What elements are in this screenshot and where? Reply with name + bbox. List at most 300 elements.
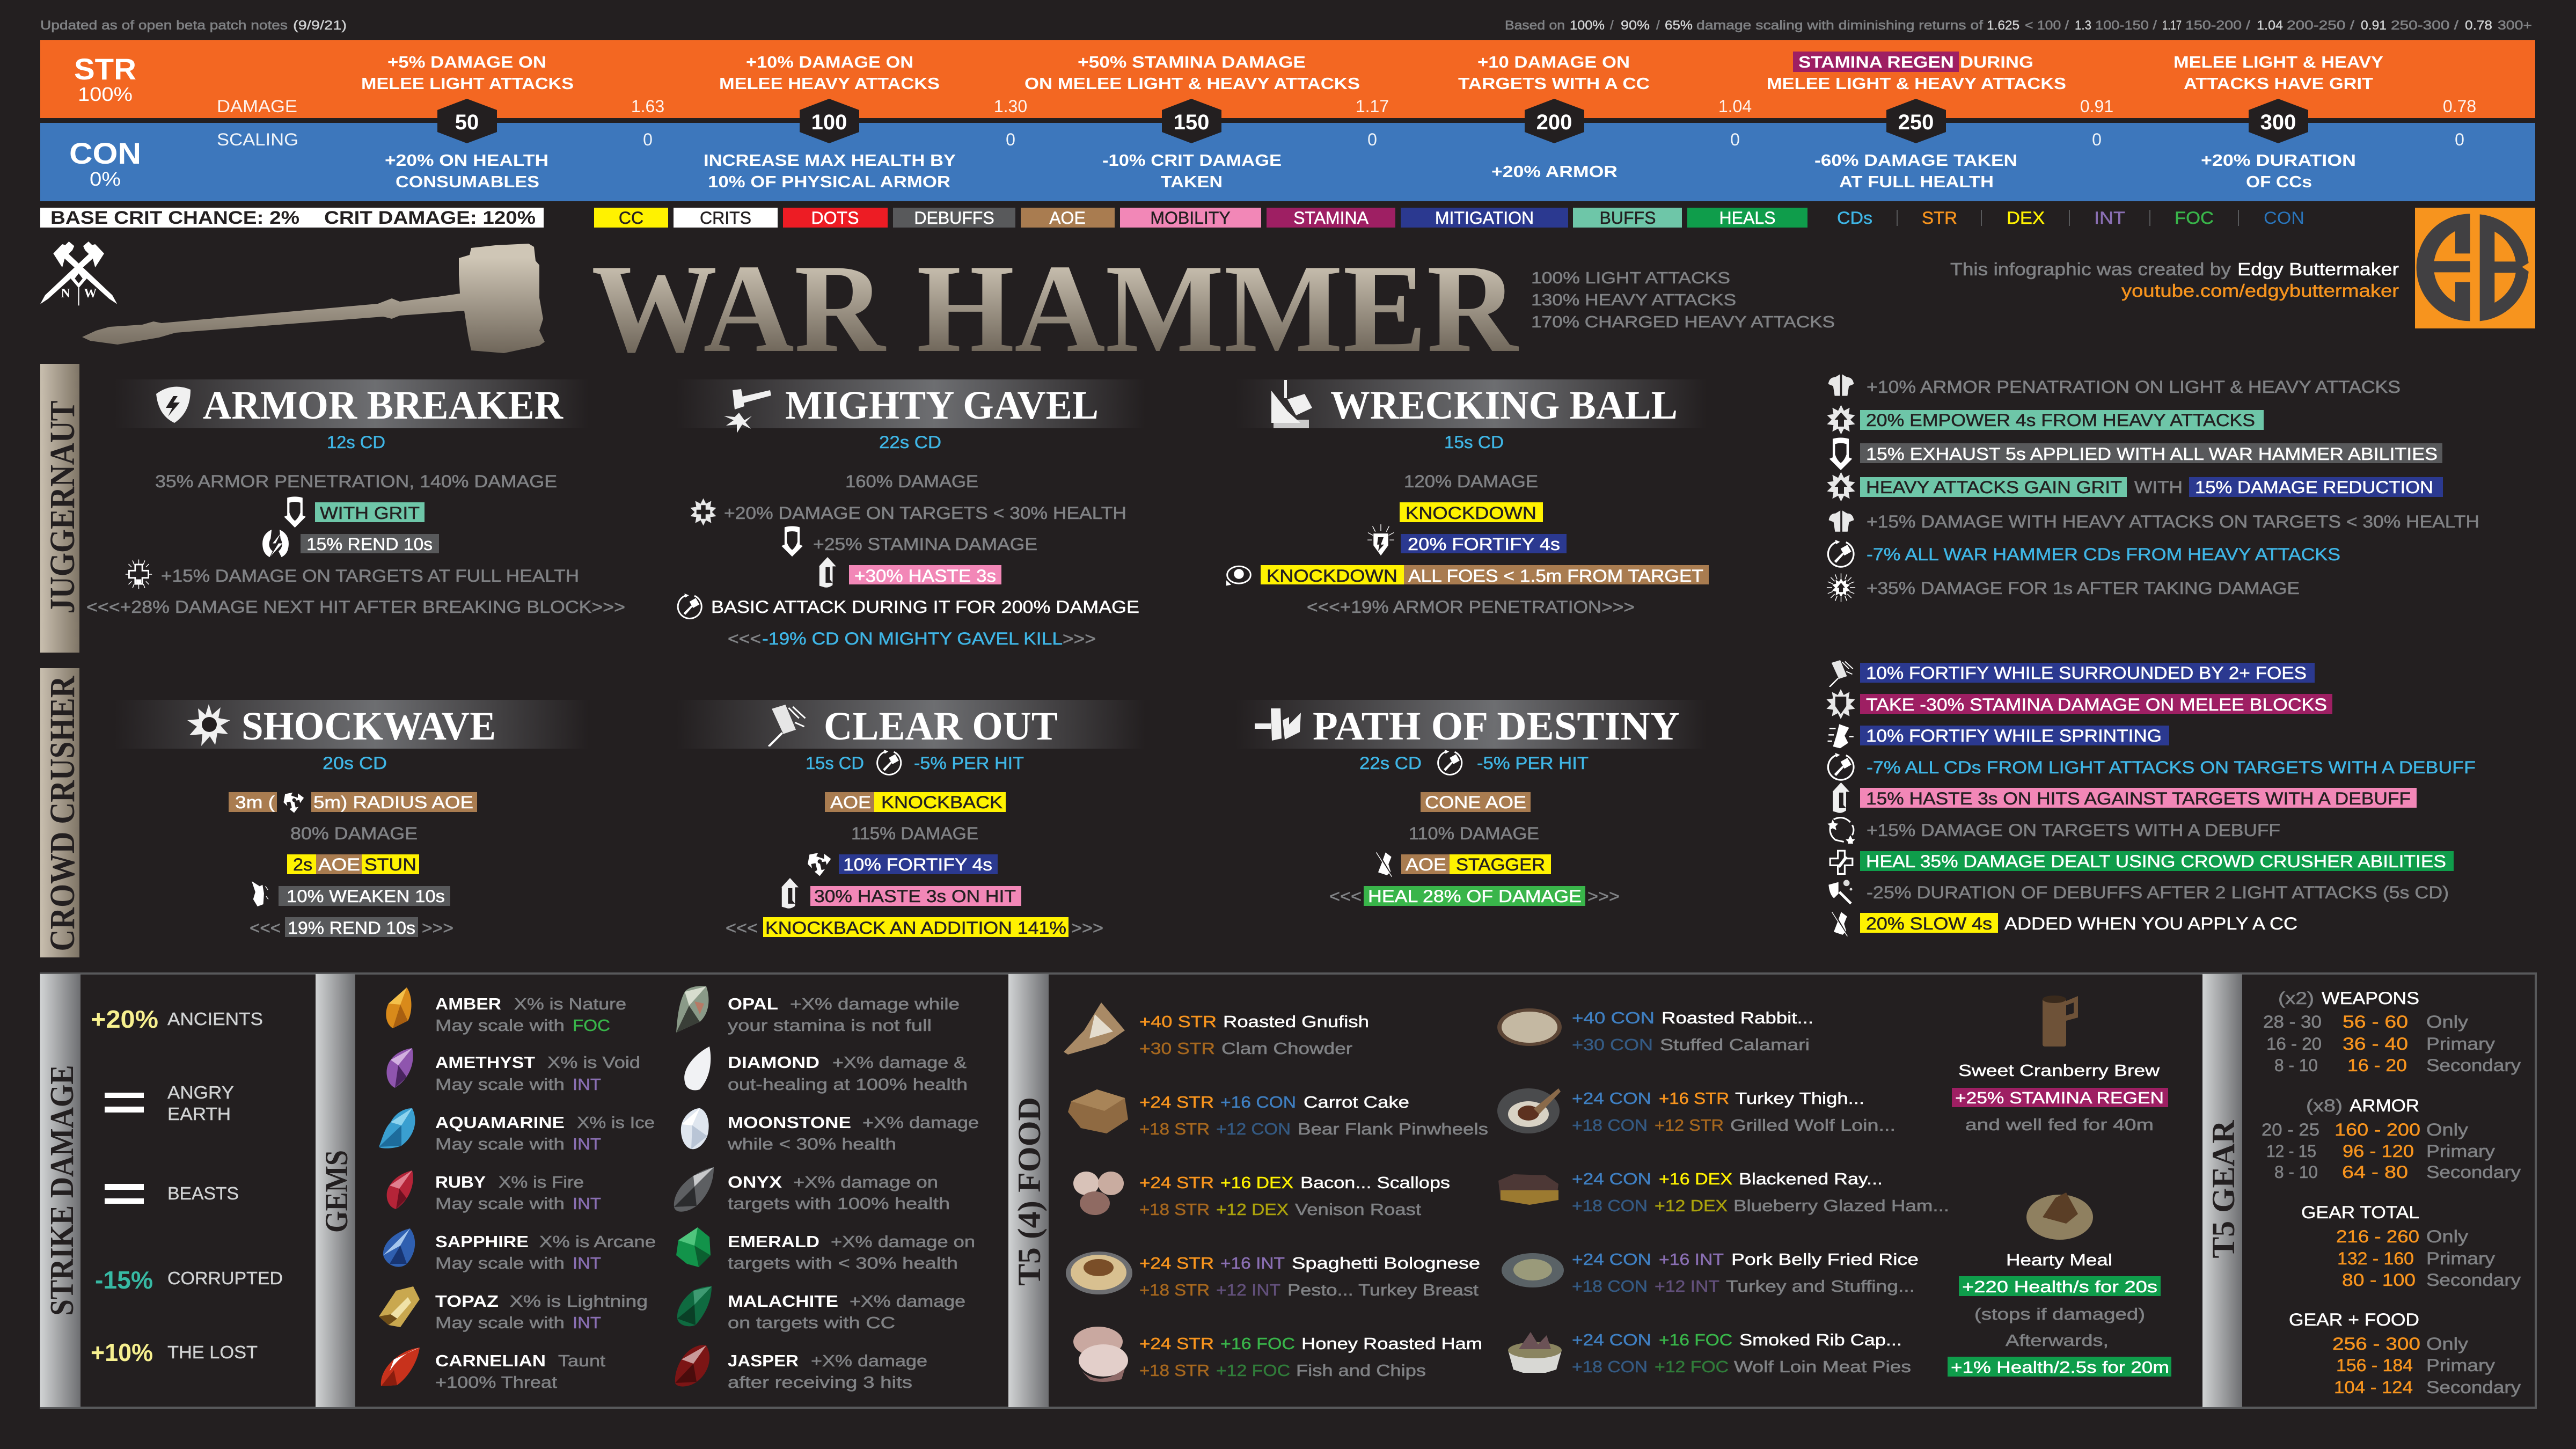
gem: topaz: INT <box>573 1313 601 1332</box>
icon: clear out hammer <box>769 705 806 747</box>
gear: armor: ARMOR <box>2350 1096 2419 1115</box>
fortify: 20% FORTIFY 4s <box>1408 535 1560 554</box>
CON perks: INCREASE MAX HEALTH BY <box>704 151 956 170</box>
passive: cooldown debuff: -7% ALL CDs FROM LIGHT ATTACKS ON TARGETS WITH A DEBUFF <box>1867 758 2476 777</box>
scaling values: 0 <box>1730 130 1740 149</box>
consumable: hearty meal: +1% Health/2.5s for 20m <box>1951 1358 2169 1377</box>
consumable: sweet cranberry brew: and well fed for 40m <box>1965 1115 2154 1134</box>
legend: stat colours: CON <box>2264 208 2304 228</box>
legend: colour chips: MITIGATION <box>1435 208 1534 228</box>
scaling note header: / <box>1656 18 1660 33</box>
scaling values: 1.30 <box>994 97 1027 116</box>
scaling note header: 200-250 / <box>2287 18 2354 33</box>
corrupted row: -15% <box>95 1266 153 1294</box>
knockdown: KNOCKDOWN <box>1406 503 1536 523</box>
legend: colour chips: CRITS <box>700 208 751 228</box>
passive: low health damage: +15% DAMAGE WITH HEAVY ATTACKS ON TARGETS < 30% HEALTH <box>1867 512 2479 531</box>
cooldown: 20s CD <box>323 753 387 773</box>
title: WAR HAMMER <box>591 239 1519 379</box>
food: carrot cake <box>1068 1089 1488 1138</box>
legend: colour chips: DOTS <box>811 208 859 228</box>
section bar: Gems <box>316 974 355 1407</box>
stun: 2s <box>293 855 312 874</box>
gear: armor: 160 - 200 <box>2334 1120 2420 1139</box>
passive: slow <box>1832 912 2297 936</box>
food: blackened ray: Blackened Ray... <box>1739 1169 1883 1188</box>
food: honey roasted ham: Honey Roasted Ham <box>1301 1334 1482 1353</box>
food: spaghetti: Pesto... Turkey Breast <box>1287 1280 1479 1299</box>
upgrade: <<<+19% ARMOR PENETRATION>>> <box>1307 597 1635 617</box>
gem: amethyst: May scale with <box>435 1075 565 1094</box>
gear: weapons: 28 - 30 <box>2263 1012 2322 1031</box>
gear: weapons: Only <box>2426 1012 2468 1031</box>
food: bacon scallops: Venison Roast <box>1295 1200 1421 1219</box>
upgrade <box>1329 886 1620 906</box>
hexagon 150 <box>1162 99 1221 143</box>
gear: armor <box>2262 1096 2521 1182</box>
angry earth row: ANGRY <box>167 1082 234 1102</box>
ancients row <box>91 1005 263 1033</box>
ancients row: +20% <box>91 1005 158 1033</box>
food: gnufish: Clam Chowder <box>1221 1039 1352 1058</box>
scaling values: 0 <box>2092 130 2102 149</box>
gear: weapons: 56 - 60 <box>2343 1012 2408 1031</box>
food: smoked rib cap: +24 CON <box>1572 1330 1651 1349</box>
legend: colour chips: AOE <box>1049 208 1086 228</box>
consumable: hearty meal <box>1948 1192 2171 1377</box>
icon: armor breaker shield <box>156 387 191 423</box>
CON perks: +20% ON HEALTH <box>385 151 548 170</box>
scaling note header: 150-200 / <box>2185 18 2250 33</box>
gem: carnelian: +100% Threat <box>435 1373 557 1392</box>
with grit <box>284 496 425 528</box>
cooldown: 15s CD <box>1444 433 1504 452</box>
gem: emerald: EMERALD <box>728 1232 819 1251</box>
weaken <box>252 881 450 906</box>
gem: ruby: X% is Fire <box>499 1173 584 1191</box>
food: smoked rib cap <box>1508 1330 1911 1376</box>
gem: malachite: +X% damage <box>850 1292 965 1311</box>
food: pork fried rice: +12 INT <box>1655 1277 1719 1296</box>
gem: amethyst <box>386 1048 640 1094</box>
gear: weapons: WEAPONS <box>2322 989 2419 1008</box>
food: gnufish: Roasted Gnufish <box>1223 1012 1369 1031</box>
damage line: 35% ARMOR PENETRATION, 140% DAMAGE <box>155 472 557 491</box>
section bar: Juggernaut: JUGGERNAUT <box>43 400 82 614</box>
gem: emerald <box>676 1227 975 1272</box>
upgrade: >>> <box>1071 918 1103 938</box>
haste <box>781 878 1021 909</box>
stun <box>287 854 419 874</box>
food: smoked rib cap: Smoked Rib Cap... <box>1739 1330 1902 1349</box>
gem: sapphire: SAPPHIRE <box>435 1232 529 1251</box>
gem: topaz: TOPAZ <box>435 1292 499 1311</box>
stamina damage: +25% STAMINA DAMAGE <box>813 535 1037 554</box>
gear: armor: Only <box>2426 1120 2468 1139</box>
gear: armor: 64 - 80 <box>2342 1162 2408 1182</box>
icon: gavel strike <box>724 389 771 433</box>
scaling note header: 1.3 <box>2075 18 2091 33</box>
gem: amber <box>386 987 626 1035</box>
upgrade: >>> <box>1587 887 1620 906</box>
full health damage: +15% DAMAGE ON TARGETS AT FULL HEALTH <box>161 566 579 586</box>
scaling values: 0 <box>643 130 653 149</box>
gem: topaz <box>379 1286 648 1332</box>
gear: total: 216 - 260 <box>2336 1227 2419 1246</box>
CON label: CON <box>69 136 141 170</box>
gem: topaz: X% is Lightning <box>510 1292 648 1311</box>
food: roasted rabbit: +30 CON <box>1572 1035 1653 1054</box>
cooldown: 22s CD <box>879 433 941 452</box>
legend: colour chips: BUFFS <box>1600 208 1656 228</box>
stun: STUN <box>364 855 416 874</box>
STR perks: STAMINA REGEN <box>1798 53 1954 71</box>
gem: aquamarine <box>379 1108 655 1153</box>
heading banner: CLEAR OUT <box>824 704 1058 749</box>
icon: path hammer <box>1255 708 1301 741</box>
creator credit: youtube.com/edgybuttermaker <box>2121 281 2399 301</box>
passive: fortify sprinting: 10% FORTIFY WHILE SPRINTING <box>1866 726 2162 745</box>
food: honey roasted ham <box>1073 1327 1482 1382</box>
food: pork fried rice: Turkey and Stuffing... <box>1726 1277 1915 1296</box>
legend: stat colours: CDs <box>1837 208 1872 228</box>
corrupted row <box>95 1266 283 1294</box>
damage line: 110% DAMAGE <box>1409 824 1539 843</box>
low health damage: +20% DAMAGE ON TARGETS < 30% HEALTH <box>724 503 1126 523</box>
aoe knockback: AOE <box>830 793 871 812</box>
gear: weapons: 16 - 20 <box>2347 1056 2407 1075</box>
fortify <box>1367 524 1567 555</box>
consumable: hearty meal: Afterwards, <box>2006 1331 2109 1350</box>
radius <box>229 792 477 813</box>
upgrade: <<<+28% DAMAGE NEXT HIT AFTER BREAKING BLOCK>>> <box>86 597 625 617</box>
food: honey roasted ham: Fish and Chips <box>1296 1361 1426 1380</box>
knockdown area: KNOCKDOWN <box>1267 566 1397 586</box>
CON label <box>69 136 141 190</box>
gem: onyx: +X% damage on <box>793 1173 938 1191</box>
icon: New World logo: N <box>61 287 70 301</box>
gear: armor: (x8) <box>2306 1096 2343 1115</box>
scaling values: 0 <box>2455 130 2464 149</box>
gem: amethyst: INT <box>573 1075 601 1094</box>
scaling values: 0.91 <box>2080 97 2113 116</box>
beasts row: BEASTS <box>167 1183 239 1203</box>
legend: colour chips: HEALS <box>1719 208 1775 228</box>
gem: opal: +X% damage while <box>790 994 960 1013</box>
heading banner: PATH OF DESTINY <box>1313 704 1680 749</box>
gem: emerald: +X% damage on <box>831 1232 975 1251</box>
section bar: Strike Damage: STRIKE DAMAGE <box>44 1065 80 1316</box>
CON perks: +20% ARMOR <box>1491 162 1618 181</box>
upgrade: <<< <box>1329 887 1362 906</box>
scaling note header: 300+ <box>2498 18 2532 33</box>
corrupted row: CORRUPTED <box>167 1268 283 1288</box>
consumable: sweet cranberry brew: +25% STAMINA REGEN <box>1955 1088 2164 1107</box>
food: roasted rabbit: Stuffed Calamari <box>1660 1035 1810 1054</box>
upgrade: >>> <box>1063 629 1096 648</box>
scaling note header: 0.78 <box>2465 18 2492 33</box>
lost row <box>91 1338 258 1366</box>
panel: STR and CON scaling bands <box>40 40 2535 201</box>
gear: armor: 8 - 10 <box>2274 1162 2318 1182</box>
scaling note header: 1.17 <box>2162 18 2182 33</box>
food: smoked rib cap: Wolf Loin Meat Pies <box>1734 1357 1911 1376</box>
food: turkey thigh <box>1497 1088 1896 1135</box>
gear: total: 132 - 160 <box>2337 1249 2414 1268</box>
gem: malachite: on targets with CC <box>728 1313 895 1332</box>
gem: onyx <box>674 1167 950 1213</box>
food: smoked rib cap: +18 CON <box>1572 1357 1648 1376</box>
scaling note header: 1.04 <box>2257 18 2283 33</box>
gem: carnelian: CARNELIAN <box>435 1351 546 1370</box>
panel: Strike Damage <box>91 1005 283 1366</box>
STR perks <box>361 52 2383 93</box>
food: turkey thigh: +16 STR <box>1659 1089 1729 1108</box>
knockdown area <box>1226 565 1709 586</box>
consumable: hearty meal: (stops if damaged) <box>1974 1305 2145 1323</box>
upgrade: <<< <box>250 918 281 938</box>
ancients row: ANCIENTS <box>167 1009 263 1029</box>
gem: sapphire: X% is Arcane <box>539 1232 656 1251</box>
food: carrot cake: +24 STR <box>1139 1093 1214 1111</box>
cooldown <box>806 750 1024 774</box>
damage scaling labels: DAMAGE <box>217 97 297 116</box>
creator credit: Edgy Buttermaker <box>2237 259 2399 279</box>
section bar: T5 Gear: T5 GEAR <box>2206 1120 2241 1258</box>
scaling note header: 100% <box>1570 18 1605 33</box>
crit stats bar: BASE CRIT CHANCE: 2% <box>50 208 299 228</box>
upgrade: >>> <box>422 918 453 938</box>
food: honey roasted ham: +16 FOC <box>1220 1334 1295 1353</box>
STR perks: MELEE LIGHT & HEAVY <box>2174 53 2383 71</box>
gear: gear plus food: 256 - 300 <box>2332 1334 2420 1353</box>
gem: diamond <box>684 1046 968 1094</box>
weaken: 10% WEAKEN 10s <box>287 887 445 906</box>
heading banner <box>676 700 1145 749</box>
food: pork fried rice: +24 CON <box>1572 1250 1651 1269</box>
food: bacon scallops <box>1073 1172 1450 1219</box>
icon: New World logo <box>40 241 117 305</box>
scaling values: 0.78 <box>2443 97 2476 116</box>
food: carrot cake: +12 CON <box>1216 1119 1291 1138</box>
gear: total: Only <box>2426 1227 2468 1246</box>
food: spaghetti: +24 STR <box>1139 1254 1214 1272</box>
passive: fortify surrounded <box>1829 660 2315 687</box>
CON band <box>40 123 2535 201</box>
cooldown: 15s CD <box>806 753 864 773</box>
gem: amethyst: X% is Void <box>547 1053 640 1072</box>
CON label: 0% <box>90 168 121 190</box>
gear: weapons: 16 - 20 <box>2266 1034 2322 1053</box>
gem: amber: AMBER <box>435 994 501 1013</box>
icon: New World logo: W <box>84 287 97 301</box>
food: blackened ray: +18 CON <box>1572 1196 1648 1215</box>
gem: ruby: RUBY <box>435 1173 486 1191</box>
food: honey roasted ham: +24 STR <box>1139 1334 1214 1353</box>
food: gnufish: +40 STR <box>1139 1012 1217 1031</box>
upgrade: -19% CD ON MIGHTY GAVEL KILL <box>762 629 1063 648</box>
food: pork fried rice: Pork Belly Fried Rice <box>1731 1250 1919 1269</box>
heading banner <box>1235 379 1707 428</box>
gear: gear plus food: Only <box>2426 1334 2468 1353</box>
lost row: THE LOST <box>167 1342 258 1362</box>
passive: cooldown: -7% ALL WAR HAMMER CDs FROM HEAVY ATTACKS <box>1867 545 2340 564</box>
CON perks: -10% CRIT DAMAGE <box>1102 151 1282 170</box>
gear: gear plus food: Secondary <box>2426 1378 2521 1397</box>
food: pork fried rice: +18 CON <box>1572 1277 1648 1296</box>
gem: opal: your stamina is not full <box>728 1016 932 1035</box>
gem: opal: OPAL <box>728 994 778 1013</box>
food: turkey thigh: Grilled Wolf Loin... <box>1730 1116 1896 1135</box>
heading banner: ARMOR BREAKER <box>203 383 564 428</box>
gear: gear plus food: GEAR + FOOD <box>2289 1310 2419 1329</box>
upgrade: <<< <box>728 629 761 648</box>
food: gnufish: +30 STR <box>1139 1039 1215 1058</box>
food: carrot cake: +16 CON <box>1220 1093 1296 1111</box>
gem: emerald: targets with < 30% health <box>728 1254 958 1272</box>
heading banner: SHOCKWAVE <box>241 704 496 749</box>
panel: Mighty Gavel <box>676 379 1145 648</box>
gem: jasper: JASPER <box>728 1351 799 1370</box>
passive: haste <box>1833 782 2417 813</box>
icon: shockwave burst <box>187 704 230 746</box>
scaling values: 1.04 <box>1718 97 1752 116</box>
CON perks: CONSUMABLES <box>396 172 539 191</box>
attack multipliers: 170% CHARGED HEAVY ATTACKS <box>1531 312 1835 331</box>
CON perks: OF CCs <box>2246 172 2312 191</box>
scaling note header: / <box>1610 18 1614 33</box>
scaling note header: 0.91 <box>2361 18 2387 33</box>
CON perks <box>385 151 2356 191</box>
panel: Armor Breaker <box>86 379 625 617</box>
STR perks: DURING <box>1960 53 2033 71</box>
section bar: Food: T5 (4) FOOD <box>1012 1097 1047 1286</box>
damage line: 160% DAMAGE <box>845 472 978 491</box>
STR perks: +5% DAMAGE ON <box>387 53 546 71</box>
CON perks: +20% DURATION <box>2201 151 2356 170</box>
upgrade: HEAL 28% OF DAMAGE <box>1368 887 1582 906</box>
gem: moonstone <box>681 1108 979 1153</box>
upgrade: 19% REND 10s <box>288 918 415 938</box>
food: blackened ray: Blueberry Glazed Ham... <box>1733 1196 1949 1215</box>
scaling note header: 65% <box>1665 18 1693 33</box>
food: turkey thigh: Turkey Thigh... <box>1735 1089 1864 1108</box>
section bar: T5 Gear <box>2202 974 2242 1407</box>
gem: topaz: May scale with <box>435 1313 565 1332</box>
gear: gear plus food: 104 - 124 <box>2334 1378 2413 1397</box>
CON perks: TAKEN <box>1161 172 1223 191</box>
gear: gear plus food: Primary <box>2426 1356 2495 1375</box>
cooldown: 12s CD <box>327 433 385 452</box>
scaling note header: 100-150 / <box>2095 18 2157 33</box>
gem: diamond: +X% damage & <box>832 1053 967 1072</box>
STR label <box>74 52 136 105</box>
crit stats bar: CRIT DAMAGE: 120% <box>324 208 536 228</box>
passive: grit: HEAVY ATTACKS GAIN GRIT <box>1866 478 2122 497</box>
hexagon 200 <box>1525 99 1584 143</box>
panel: Wrecking Ball <box>1226 379 1709 617</box>
gem: amber: May scale with <box>435 1016 565 1035</box>
radius: 3m ( <box>235 793 275 812</box>
gear: weapons: Primary <box>2426 1034 2495 1053</box>
angry earth row <box>105 1082 234 1124</box>
hexagon 250: 250 <box>1898 111 1934 134</box>
gear: weapons <box>2263 989 2521 1075</box>
damage scaling labels <box>217 97 298 149</box>
divider line with hexagon at 50: 50 <box>455 111 479 134</box>
passive: stamina <box>1826 689 2332 719</box>
food: roasted rabbit: +40 CON <box>1572 1008 1655 1027</box>
passive: exhaust <box>1829 437 2442 470</box>
hexagon 200: 200 <box>1536 111 1572 134</box>
creator credit <box>1950 259 2399 301</box>
gem: amethyst: AMETHYST <box>435 1053 535 1072</box>
food: turkey thigh: +18 CON <box>1572 1116 1648 1135</box>
passive: grit: 15% DAMAGE REDUCTION <box>2195 478 2433 497</box>
upgrade <box>250 917 453 938</box>
STR perks: ON MELEE LIGHT & HEAVY ATTACKS <box>1024 74 1360 93</box>
legend: stat colours: FOC <box>2175 208 2214 228</box>
consumable: sweet cranberry brew <box>1952 996 2168 1134</box>
hexagon 100: 100 <box>811 111 847 134</box>
legend: stat colours: INT <box>2094 208 2125 228</box>
heading banner: WRECKING BALL <box>1330 383 1678 428</box>
food: pork fried rice: +16 INT <box>1659 1250 1724 1269</box>
gem: moonstone: while < 30% health <box>727 1135 896 1153</box>
upgrade: <<< <box>726 918 758 938</box>
gear: total: Secondary <box>2426 1270 2521 1290</box>
food: spaghetti: +12 INT <box>1216 1280 1280 1299</box>
panel: Clear Out <box>676 700 1145 938</box>
legend: colour chips <box>594 208 1807 228</box>
attack multipliers <box>1531 268 1835 331</box>
basic attack: BASIC ATTACK DURING IT FOR 200% DAMAGE <box>711 597 1139 617</box>
scaling values: 0 <box>1006 130 1015 149</box>
passive: fortify surrounded: 10% FORTIFY WHILE SURROUNDED BY 2+ FOES <box>1866 663 2307 683</box>
stun: AOE <box>318 855 360 874</box>
damage line: 115% DAMAGE <box>851 824 978 843</box>
section bar: Strike Damage <box>40 974 80 1407</box>
upgrade <box>726 917 1103 938</box>
knockdown area: ALL FOES < 1.5m FROM TARGET <box>1408 566 1703 586</box>
CON perks: AT FULL HEALTH <box>1839 172 1994 191</box>
damage scaling labels: SCALING <box>217 130 298 149</box>
cooldown: 22s CD <box>1359 753 1422 773</box>
with grit: WITH GRIT <box>320 503 420 523</box>
food: carrot cake: Bear Flank Pinwheels <box>1298 1119 1488 1138</box>
damage line: 120% DAMAGE <box>1404 472 1538 491</box>
haste: 30% HASTE 3s ON HIT <box>814 887 1016 906</box>
patch note header <box>40 18 347 33</box>
food: carrot cake: Carrot Cake <box>1304 1093 1409 1111</box>
attack multipliers: 130% HEAVY ATTACKS <box>1531 290 1736 309</box>
legend: stat colours <box>1837 208 2304 228</box>
haste: +30% HASTE 3s <box>854 566 996 586</box>
scaling note header: Based on <box>1505 18 1565 33</box>
panel: Juggernaut passives <box>1827 374 2479 602</box>
gem: moonstone: MOONSTONE <box>728 1113 851 1132</box>
heading banner <box>1235 700 1707 749</box>
food: bacon scallops: +18 STR <box>1139 1200 1210 1219</box>
food: bacon scallops: Bacon... Scallops <box>1300 1173 1450 1192</box>
gear: armor: Secondary <box>2426 1162 2521 1182</box>
passive: debuff damage: +15% DAMAGE ON TARGETS WITH A DEBUFF <box>1867 821 2280 840</box>
rend <box>262 530 439 557</box>
haste <box>819 557 1001 588</box>
food: roasted rabbit <box>1497 1008 1813 1054</box>
CON perks: 10% OF PHYSICAL ARMOR <box>708 172 950 191</box>
consumable: hearty meal: +220 Health/s for 20s <box>1962 1277 2157 1296</box>
